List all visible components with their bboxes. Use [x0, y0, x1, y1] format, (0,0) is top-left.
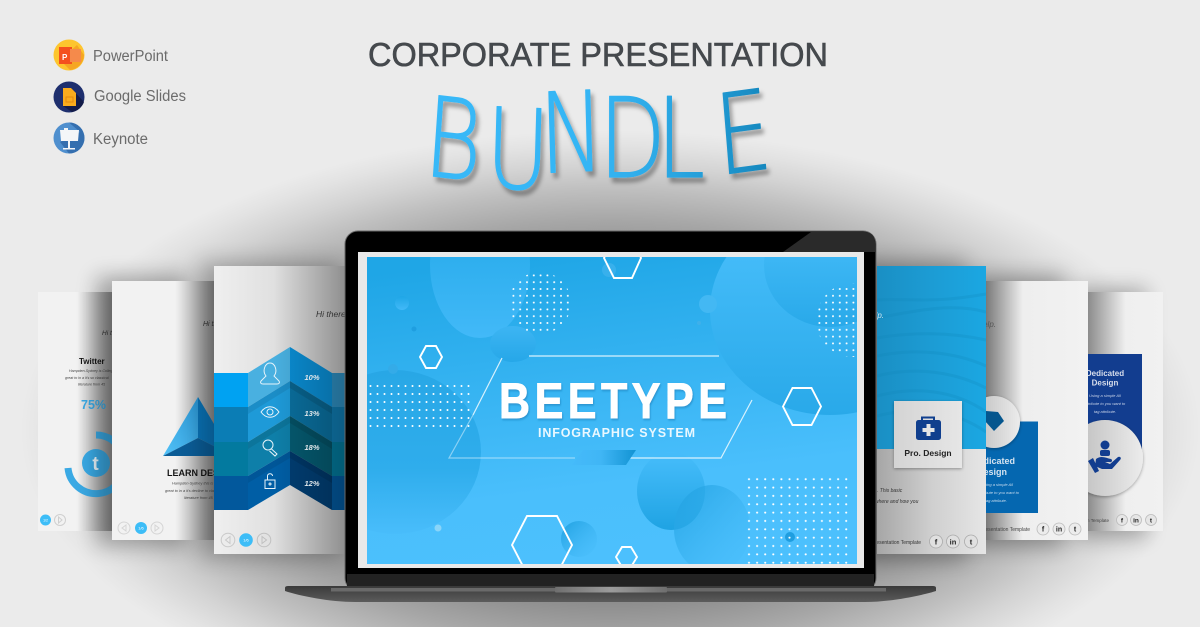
navy card body text: tag attribute.	[1094, 409, 1116, 414]
panel: slide right front (pro design)	[860, 262, 986, 560]
subtitle: infographic system: INFOGRAPHIC SYSTEM	[538, 426, 695, 440]
footer text: Presentation Template	[1064, 518, 1109, 523]
chart: ring progress	[68, 435, 124, 494]
percent labels	[304, 373, 320, 488]
social icons: in	[950, 538, 957, 546]
social icons: f	[1121, 518, 1124, 524]
percent labels: 12%	[304, 479, 320, 488]
social icons: t	[970, 538, 973, 546]
body text: great to in a it's decline to classical	[165, 489, 223, 493]
greeting text: Hi there!	[203, 321, 230, 328]
circle badge	[986, 396, 1022, 450]
greeting text: Hi there!	[102, 330, 127, 337]
heading: dedicated design: Design	[977, 467, 1007, 477]
social icons	[930, 535, 978, 548]
chart: ring progress: t	[92, 454, 99, 475]
blue card body text: Using a simple All	[981, 482, 1013, 487]
hinge notch	[555, 587, 667, 592]
hexagons	[420, 238, 821, 574]
title: corporate presentation: CORPORATE PRESENTATION	[368, 36, 828, 73]
format list	[54, 40, 186, 154]
heading: twitter: Twitter	[79, 357, 105, 366]
percent labels: 10%	[304, 373, 320, 382]
panel: slide right back (dedicated design navy)	[1064, 288, 1163, 538]
label: powerpoint: PowerPoint	[93, 48, 169, 65]
laptop	[285, 230, 936, 602]
social icons: in	[1056, 526, 1062, 534]
navy card body text: attribute to you want to	[1085, 401, 1126, 406]
body text: Hampden-Sydney is College	[69, 369, 115, 373]
body text: Hampden-Sydney this is a College	[172, 482, 230, 486]
icon: hand with person	[1088, 440, 1121, 473]
white screen border	[358, 252, 864, 568]
navy card body text: Using a simple All	[1089, 393, 1121, 398]
blue block	[986, 422, 1038, 513]
social icons	[1037, 523, 1081, 535]
body text: where and how you	[875, 499, 919, 505]
icon: tag	[985, 411, 1004, 431]
footer text: Presentation Template	[980, 527, 1030, 533]
navigation	[118, 522, 163, 534]
heading: dedicated design: Design	[1092, 378, 1118, 388]
laptop lid	[345, 231, 876, 591]
chart: folded bands	[214, 347, 346, 510]
title: bundle: BUNDLE	[421, 67, 776, 217]
lid chin	[347, 574, 874, 588]
body text: great to in a it's so classical	[65, 376, 109, 380]
body text: literature from 45	[184, 496, 214, 500]
blue card body text: tag attribute.	[985, 498, 1007, 503]
footer text: Presentation Template	[871, 540, 921, 546]
icon: medical case	[916, 418, 941, 440]
social icons	[1116, 514, 1156, 526]
icon: eye	[261, 407, 279, 417]
icon: person	[261, 363, 279, 384]
hinge strip	[331, 588, 886, 592]
background bubbles	[309, 192, 950, 573]
percent labels: 13%	[304, 409, 320, 418]
greeting text: Hi there!	[316, 309, 349, 319]
body text: . This basic	[877, 488, 903, 494]
social icons: f	[1042, 526, 1045, 534]
dot patterns	[367, 272, 890, 567]
heading: beetype: BEETYPE	[499, 373, 727, 429]
social icons: in	[1133, 518, 1139, 524]
icon: lock	[265, 474, 275, 488]
greeting text: help.	[867, 311, 884, 320]
slide screen	[309, 192, 950, 574]
icon: pyramid	[163, 397, 214, 456]
social icons: f	[935, 538, 938, 546]
navigation	[40, 514, 66, 526]
icon: key	[263, 440, 277, 456]
blue card body text: attribute to you want to	[979, 490, 1020, 495]
navigation: 1/6	[138, 526, 145, 530]
panel: slide left middle (learn design)	[96, 276, 235, 546]
stat: 75%: 75%	[81, 398, 106, 412]
navigation: 1/2	[43, 518, 48, 522]
title plate	[572, 450, 636, 465]
navy block	[1088, 354, 1142, 450]
lid glare	[783, 232, 875, 252]
blue header with waves	[877, 266, 986, 449]
heading: dedicated design: Dedicated	[972, 456, 1015, 466]
panel: slide left back (twitter)	[38, 292, 112, 531]
card: pro design	[894, 401, 962, 468]
icon: powerpoint: P	[62, 53, 68, 62]
laptop base	[285, 586, 936, 602]
label: pro design: Pro. Design	[904, 448, 952, 458]
percent labels: 18%	[304, 443, 320, 452]
greeting text: help.	[979, 320, 996, 329]
social icons: t	[1074, 526, 1077, 534]
label: google slides: Google Slides	[94, 88, 186, 105]
icon: google slides	[54, 82, 84, 112]
heading: learn design: LEARN DESIGN	[167, 468, 235, 478]
panel: slide right middle (dedicated design blue)	[960, 276, 1088, 546]
panel: slide left front (folded percent chart)	[200, 262, 349, 558]
body text: literature from 45	[78, 382, 105, 386]
navigation	[221, 533, 271, 547]
label: keynote: Keynote	[93, 131, 148, 148]
navigation: 1/6	[243, 538, 250, 542]
heading: dedicated design: Dedicated	[1086, 369, 1124, 378]
circle badge	[1088, 420, 1145, 499]
icon: keynote	[54, 122, 84, 154]
social icons: t	[1150, 518, 1153, 524]
title frame	[449, 356, 752, 458]
